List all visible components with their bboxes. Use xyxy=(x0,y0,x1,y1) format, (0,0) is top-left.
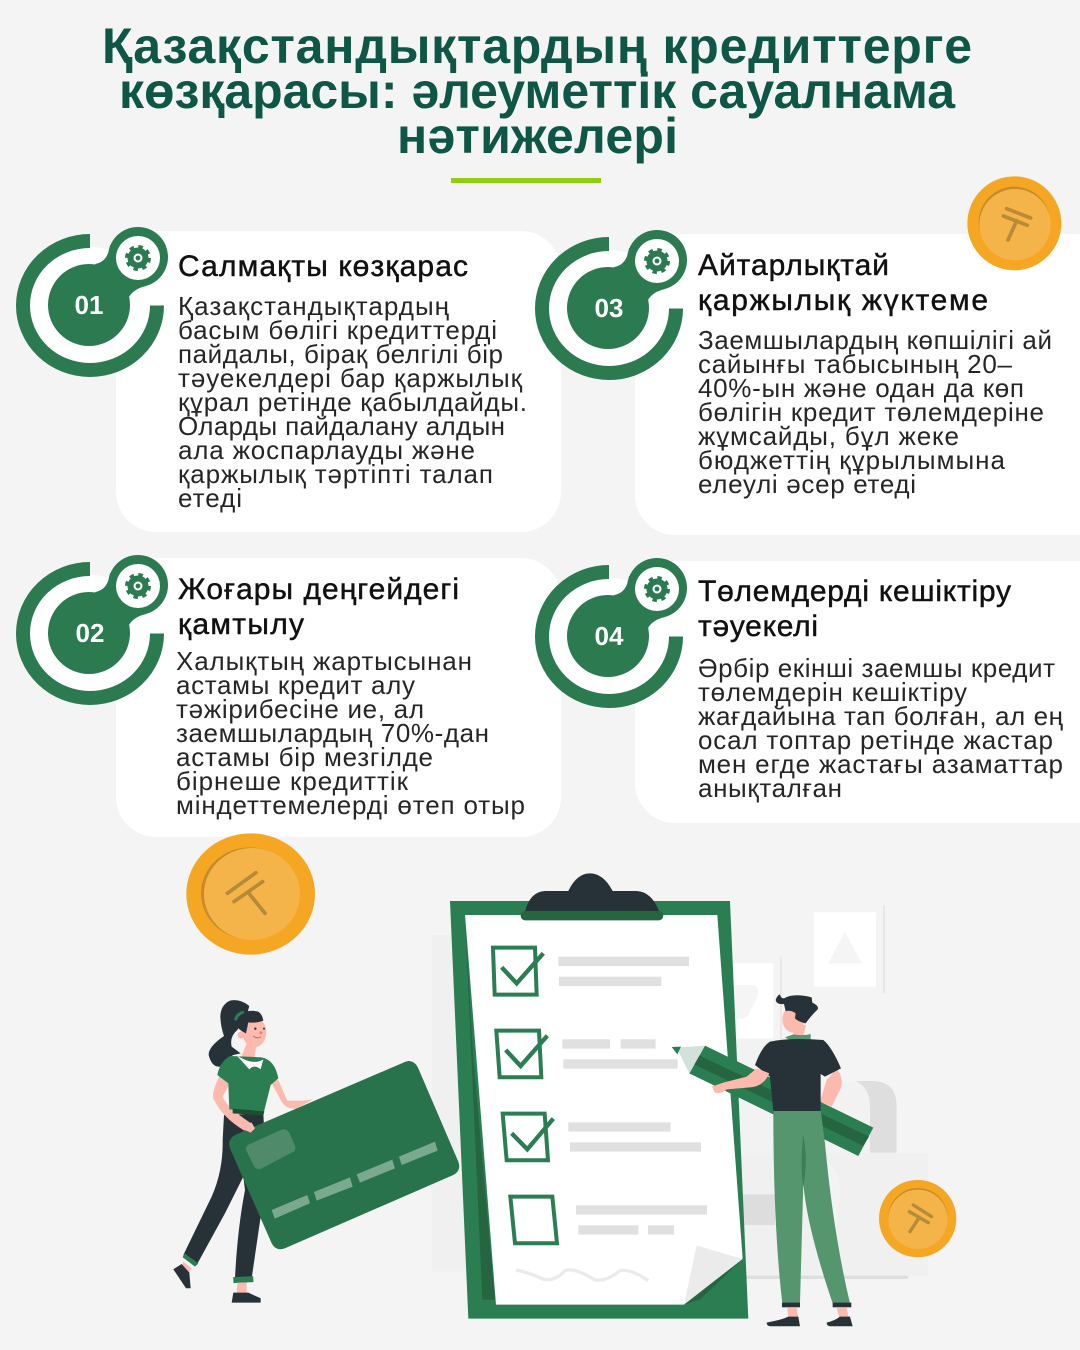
text block: card 03: елеулі әсер етеді xyxy=(698,469,916,499)
heading: card 02 xyxy=(178,573,459,641)
face xyxy=(253,1027,265,1038)
icon: coin bottom left xyxy=(186,833,315,955)
text block: card 03: бюджеттің құрылымына xyxy=(698,445,1006,475)
checkbox 3 xyxy=(503,1114,553,1160)
illustration: man with pencil xyxy=(672,994,873,1326)
head xyxy=(242,1017,266,1047)
text block: card 03 xyxy=(698,325,1052,499)
head xyxy=(782,1006,804,1033)
text block: card 04: осал топтар ретінде жастар xyxy=(698,725,1053,755)
heading: card 03 xyxy=(698,249,988,317)
text block: card 04: жағдайына тап болған, ал ең xyxy=(698,701,1064,731)
text block: card 01: қаржылық тәртіпті талап xyxy=(178,459,493,489)
title xyxy=(102,18,972,164)
text block: card 03: бөлігін кредит төлемдеріне xyxy=(698,397,1044,427)
heading: card 04: Төлемдерді кешіктіру xyxy=(698,575,1011,608)
text block: card 01: құрал ретінде қабылдайды. xyxy=(178,387,527,417)
text block: card 04: төлемдерін кешіктіру xyxy=(698,677,967,707)
belt xyxy=(233,1109,264,1116)
text block: card 04: анықталған xyxy=(698,773,842,803)
icon: gear xyxy=(646,578,668,600)
text block: card 02: заемшылардың 70%-дан xyxy=(176,718,489,748)
pencil xyxy=(689,1046,873,1156)
illustration: clipboard xyxy=(450,873,748,1319)
text block: card 03: Заемшылардың көпшілігі ай xyxy=(698,325,1052,355)
title: Қазақстандықтардың кредиттерге xyxy=(102,18,972,74)
text block: card 02: астамы бір мезгілде xyxy=(176,742,433,772)
shirt xyxy=(755,1039,841,1111)
page fold xyxy=(684,1246,743,1305)
front arm xyxy=(712,1068,769,1093)
text block: card 02 xyxy=(176,646,525,820)
number 01: 01 xyxy=(75,290,103,320)
back leg xyxy=(183,1113,265,1278)
text block: card 01: Қазақстандықтардың xyxy=(178,291,450,321)
text block: card 03: сайынғы табысының 20– xyxy=(698,349,1013,379)
text block: card 02: бірнеше кредиттік xyxy=(176,766,409,796)
icon: gear xyxy=(646,250,668,272)
collar xyxy=(237,1055,263,1069)
panel: card 04 xyxy=(635,561,1080,823)
text block: card 02: Халықтың жартысынан xyxy=(176,646,472,676)
ponytail xyxy=(209,1000,249,1067)
checkbox 2 xyxy=(496,1031,547,1077)
neck xyxy=(242,1042,257,1060)
shirt xyxy=(217,1056,278,1112)
text block: card 01: ала жоспарлауды және xyxy=(178,435,475,465)
heading: card 03: қаржылық жүктеме xyxy=(698,284,988,317)
ear xyxy=(238,1031,245,1039)
back arm xyxy=(820,1068,842,1107)
badge 02 xyxy=(23,555,168,698)
text block: card 01: Оларды пайдалану алдын xyxy=(178,411,505,441)
text block: card 02: тәжірибесіне ие, ал xyxy=(176,694,424,724)
badge 03 xyxy=(542,230,687,373)
legs xyxy=(773,1110,850,1303)
number 02: 02 xyxy=(76,618,104,648)
text block: card 04: Әрбір екінші заемшы кредит xyxy=(698,653,1055,683)
text block: card 01: етеді xyxy=(178,483,242,513)
panel: card 01 xyxy=(116,231,561,532)
heading: card 03: Айтарлықтай xyxy=(698,249,889,282)
text block: card 01: тәуекелдері бар қаржылық xyxy=(178,363,523,393)
checkbox 4 xyxy=(510,1197,557,1243)
list lines xyxy=(558,957,707,1235)
text block: card 01 xyxy=(178,291,527,513)
hair xyxy=(776,994,818,1023)
heading: card 04: тәуекелі xyxy=(698,610,818,643)
heading: card 02: Жоғары деңгейдегі xyxy=(178,573,459,606)
text block: card 04: мен егде жастағы азаматтар xyxy=(698,749,1063,779)
title: көзқарасы: әлеуметтік сауалнама xyxy=(119,63,956,119)
signature xyxy=(516,1270,648,1281)
card chip xyxy=(246,1129,295,1169)
heading: card 02: қамтылу xyxy=(178,608,304,641)
badge 04 xyxy=(542,558,687,701)
text block: card 02: астамы кредит алу xyxy=(176,670,415,700)
number 03: 03 xyxy=(595,293,623,323)
icon: coin top right xyxy=(967,176,1061,270)
text block: card 01: пайдалы, бірақ белгілі бір xyxy=(178,339,503,369)
icon: gear xyxy=(126,246,150,270)
hair top xyxy=(236,1011,263,1033)
text block: card 01: басым бөлігі кредиттерді xyxy=(178,315,497,345)
arms xyxy=(213,1075,254,1133)
icon: coin bottom right xyxy=(879,1180,956,1257)
badge 01 xyxy=(23,227,168,370)
card number groups xyxy=(272,1142,438,1219)
hand xyxy=(243,1123,255,1133)
number 04: 04 xyxy=(595,621,624,651)
icon: gear xyxy=(126,574,150,598)
neck and collar xyxy=(792,1025,806,1037)
illustration: background room xyxy=(432,905,928,1279)
panel: card 03 xyxy=(635,234,1080,535)
checkbox 1 xyxy=(493,948,543,995)
heading: card 04 xyxy=(698,575,1011,643)
clip xyxy=(525,873,659,912)
title underline xyxy=(451,178,601,183)
text block: card 02: міндеттемелерді өтеп отыр xyxy=(176,790,525,820)
illustration: woman with card xyxy=(173,1000,459,1303)
title: нәтижелері xyxy=(397,108,678,164)
text block: card 04 xyxy=(698,653,1064,803)
panel: card 02 xyxy=(116,558,561,837)
text block: card 03: 40%-ын және одан да көп xyxy=(698,373,1024,403)
heading: card 01: Салмақты көзқарас xyxy=(178,250,468,283)
text block: card 03: жұмсайды, бұл жеке xyxy=(698,421,959,451)
credit card xyxy=(229,1061,459,1249)
